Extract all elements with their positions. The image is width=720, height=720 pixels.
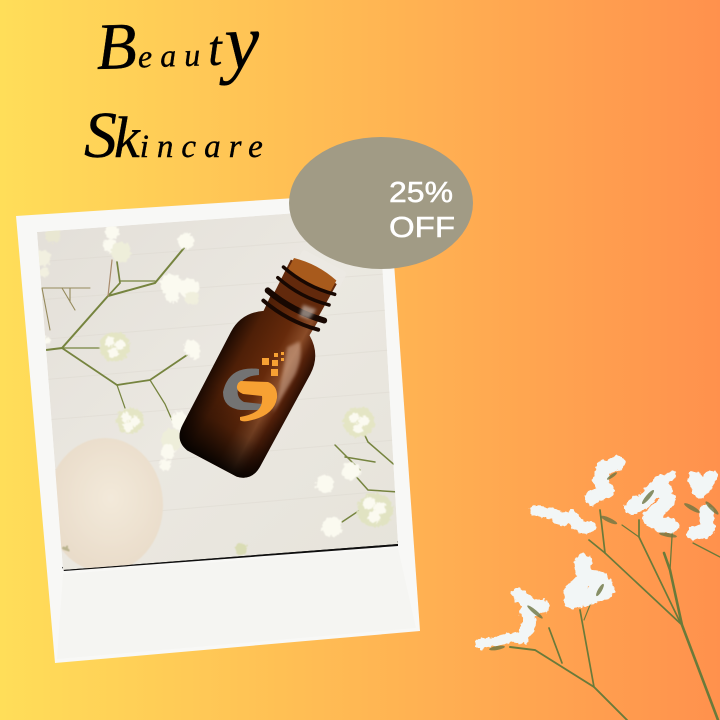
frame card	[16, 192, 420, 663]
title line: Skincare: Skincare	[84, 99, 271, 172]
left flowers	[35, 225, 200, 471]
sponge	[47, 438, 163, 572]
logo grey crescent	[223, 368, 262, 410]
sprig flowers	[480, 463, 710, 644]
top flower cluster	[592, 463, 618, 498]
cap liner	[334, 276, 345, 278]
mid flower cluster	[572, 562, 606, 600]
frame inner shade	[57, 548, 416, 659]
left flower stems	[42, 248, 187, 420]
neck opening	[288, 258, 336, 292]
bottle neck	[274, 260, 337, 316]
bottle base shade	[180, 400, 274, 478]
bottle body	[180, 296, 318, 478]
discount badge	[289, 137, 473, 269]
photo	[35, 207, 398, 572]
badge text: OFF: OFF	[389, 212, 455, 244]
badge text: 25%: 25%	[389, 177, 453, 209]
sprig buds	[489, 471, 720, 651]
title: Beauty Skincare	[84, 0, 271, 172]
glass highlight	[272, 340, 302, 412]
sprig stems	[510, 510, 720, 720]
badge oval	[289, 137, 473, 269]
collar and threads	[261, 266, 337, 333]
flower sprig bottom right	[480, 463, 720, 720]
polaroid photo frame	[16, 192, 420, 663]
logo orange s	[237, 381, 277, 421]
right flower stems	[334, 435, 396, 523]
left flower cluster	[536, 511, 590, 528]
right flowers	[63, 407, 393, 555]
right flower clusters	[632, 475, 710, 533]
logo pixels	[262, 352, 284, 376]
logo	[223, 352, 284, 421]
photo surface	[37, 207, 398, 570]
title line: Beauty: Beaut	[95, 10, 226, 84]
photo shadow line	[62, 541, 398, 571]
amber bottle	[180, 258, 345, 478]
lower flower cluster	[480, 594, 543, 644]
